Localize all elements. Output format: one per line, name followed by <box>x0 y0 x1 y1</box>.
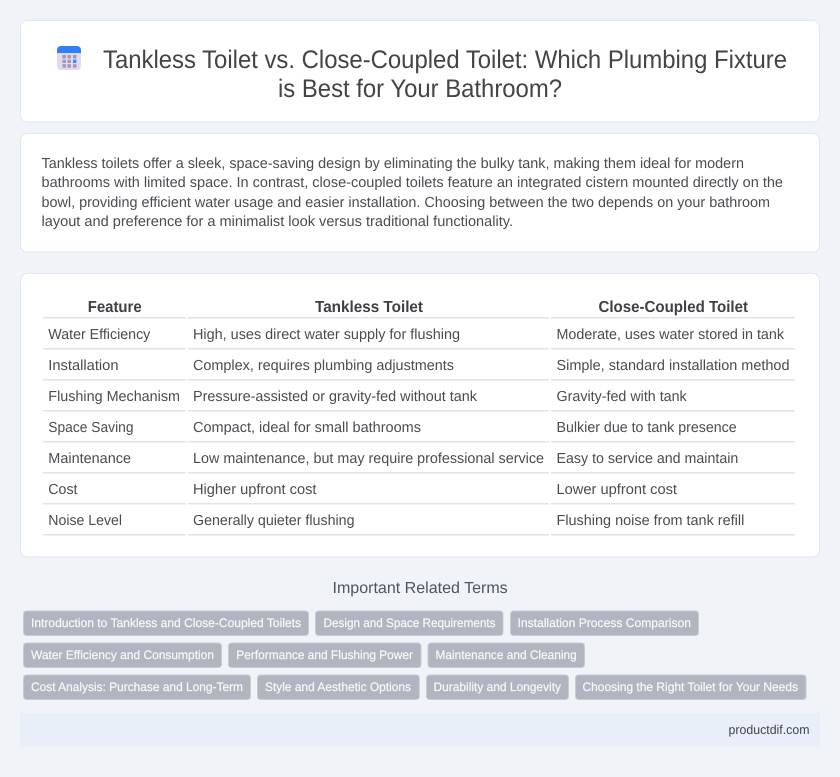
tag: Performance and Flushing Power <box>236 648 413 662</box>
panel: introduction text <box>20 134 820 252</box>
row: maintenance: Low maintenance, but may require professional service <box>193 451 544 467</box>
footer bar: productdif.com <box>728 722 810 737</box>
row: cost: Lower upfront cost <box>556 482 677 498</box>
row: flushing mechanism: Gravity-fed with tank <box>556 389 687 405</box>
table header row: Tankless Toilet <box>315 299 424 316</box>
panel: introduction text: bowl, providing efficient water usage and easier installation. Choosing between the two depends on your bathroom <box>42 195 770 211</box>
row: flushing mechanism <box>48 389 687 405</box>
row: noise level <box>48 513 744 529</box>
tag <box>576 675 806 700</box>
tag: Installation Process Comparison <box>518 616 691 630</box>
panel: introduction text: layout and preference for a minimalist look versus traditional functionality. <box>42 214 513 230</box>
panel: introduction text: bathrooms with limited space. In contrast, close-coupled toilets feature an integrated cistern mounted directly on the <box>42 175 783 191</box>
table header row: Feature <box>88 299 142 316</box>
row: noise level: Noise Level <box>48 513 122 529</box>
row: installation <box>48 358 790 374</box>
title <box>103 46 787 103</box>
icon: calendar <box>57 46 81 70</box>
tag: Style and Aesthetic Options <box>265 680 411 694</box>
row: flushing mechanism: Pressure-assisted or gravity-fed without tank <box>193 389 478 405</box>
tag <box>428 643 584 668</box>
row: water efficiency: Water Efficiency <box>48 327 151 343</box>
tag <box>24 611 308 636</box>
row: installation: Installation <box>48 358 118 374</box>
tag: Introduction to Tankless and Close-Coupled Toilets <box>31 616 301 630</box>
tag: Maintenance and Cleaning <box>436 648 577 662</box>
row: space saving: Compact, ideal for small bathrooms <box>193 420 421 436</box>
tag: Cost Analysis: Purchase and Long-Term <box>31 680 243 694</box>
row: maintenance <box>48 451 738 467</box>
row: water efficiency <box>48 327 785 343</box>
tag <box>24 675 250 700</box>
row: cost <box>48 482 677 498</box>
row: space saving: Bulkier due to tank presence <box>556 420 737 436</box>
panel: introduction text: Tankless toilets offer a sleek, space-saving design by eliminating the bulky tank, making them ideal for modern <box>42 156 744 172</box>
row: cost: Cost <box>48 482 78 498</box>
tag: Water Efficiency and Consumption <box>31 648 214 662</box>
tag: Choosing the Right Toilet for Your Needs <box>582 680 798 694</box>
title: is Best for Your Bathroom? <box>278 75 562 103</box>
heading: important related terms: Important Related Terms <box>332 580 508 597</box>
title: Tankless Toilet vs. Close-Coupled Toilet: Which Plumbing Fixture <box>103 46 787 74</box>
tag <box>510 611 698 636</box>
tag: Durability and Longevity <box>434 680 562 694</box>
panel: comparison table <box>20 274 820 557</box>
panel: title header <box>20 20 820 122</box>
row: installation: Complex, requires plumbing adjustments <box>193 358 454 374</box>
tag <box>228 643 421 668</box>
table header row: Close-Coupled Toilet <box>598 299 749 316</box>
row: noise level: Generally quieter flushing <box>193 513 354 529</box>
row: water efficiency: Moderate, uses water stored in tank <box>556 327 785 343</box>
row: maintenance: Maintenance <box>48 451 131 467</box>
related term tags <box>24 611 806 700</box>
row: space saving: Space Saving <box>48 420 133 436</box>
table header row <box>88 299 749 316</box>
row: installation: Simple, standard installation method <box>556 358 790 374</box>
row: noise level: Flushing noise from tank refill <box>556 513 744 529</box>
row: space saving <box>48 420 737 436</box>
tag <box>316 611 503 636</box>
row: flushing mechanism: Flushing Mechanism <box>48 389 180 405</box>
row: maintenance: Easy to service and maintain <box>556 451 738 467</box>
row: water efficiency: High, uses direct water supply for flushing <box>193 327 460 343</box>
tag <box>258 675 419 700</box>
footer bar <box>20 713 820 747</box>
row: cost: Higher upfront cost <box>193 482 316 498</box>
tag <box>24 643 222 668</box>
tag: Design and Space Requirements <box>324 616 496 630</box>
tag <box>426 675 568 700</box>
